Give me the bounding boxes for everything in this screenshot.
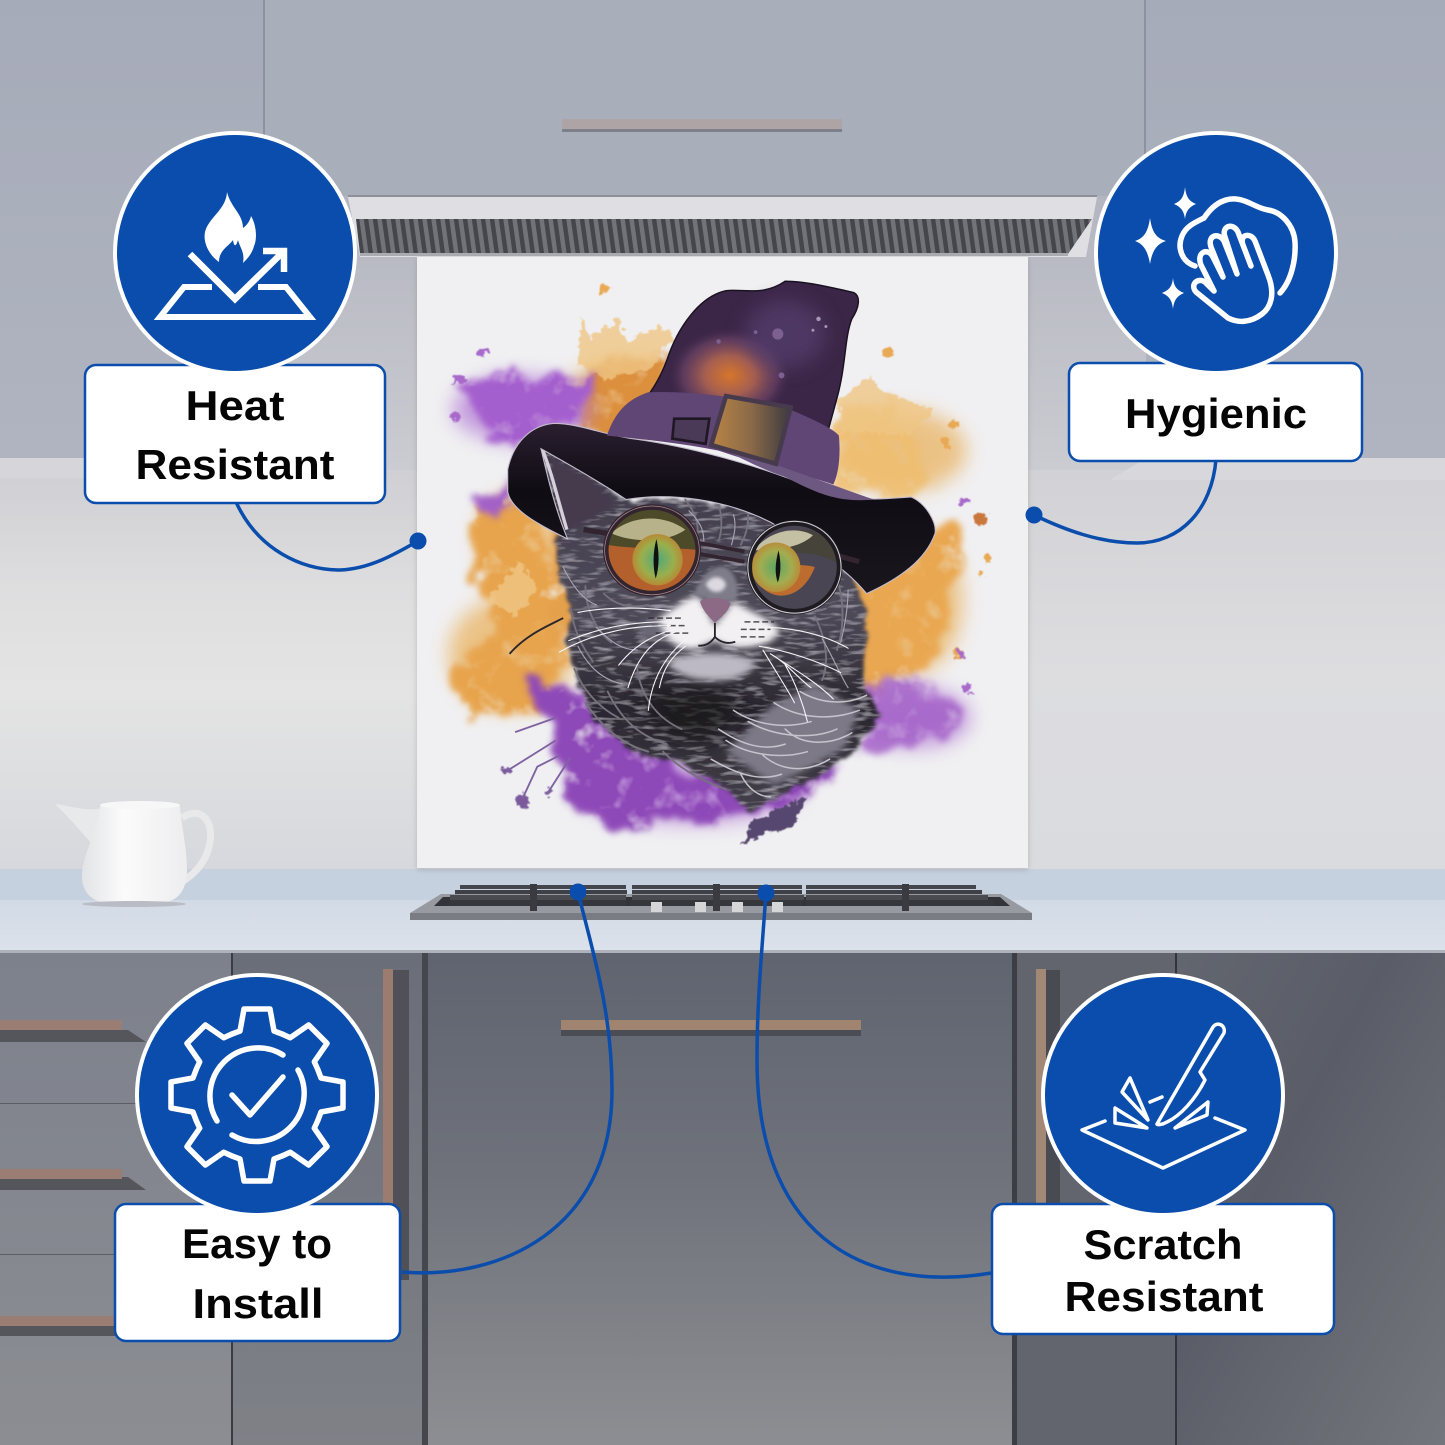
heading: Easy to: [182, 1220, 332, 1267]
label box: [115, 1204, 400, 1341]
upper cabinet handle: [562, 119, 842, 129]
soft orange wash: [448, 360, 966, 710]
heading line two: Resistant: [136, 441, 335, 488]
connector: scratch resistant: [757, 884, 991, 1277]
orange watercolor: [448, 353, 963, 718]
stray black line: [510, 618, 563, 654]
badge circle: [115, 133, 355, 373]
feature: easy to install: [115, 975, 400, 1341]
heading line two: Install: [192, 1280, 324, 1327]
witch hat: [508, 281, 935, 594]
label box: [1069, 363, 1362, 461]
hat band: [607, 392, 840, 484]
glasses frame: [584, 507, 859, 612]
wall tiles right: [1028, 470, 1445, 870]
muzzle: [659, 596, 780, 649]
feature: hygienic: [1069, 133, 1362, 461]
icon: hand wiping with sparkles: [1135, 187, 1295, 321]
feature: scratch resistant: [992, 975, 1334, 1334]
cheek shading: [637, 618, 682, 641]
nose bridge: [695, 567, 738, 603]
label box: [992, 1204, 1334, 1334]
right lens: [749, 523, 840, 612]
kettle: [55, 801, 211, 907]
right cabinet underside: [1110, 458, 1445, 480]
icon: flame over surface: [160, 192, 310, 317]
connector: hygienic: [1026, 459, 1216, 543]
hob: [410, 884, 1032, 920]
extractor hood: [348, 195, 1097, 257]
hat crown: [607, 281, 858, 436]
cat fur: [510, 449, 880, 812]
hat glow: [667, 326, 793, 424]
left cabinet underside: [0, 458, 264, 478]
heading line two: Resistant: [1064, 1273, 1264, 1320]
wall tiles left: [0, 470, 420, 870]
icon: knife scratching surface: [1082, 1024, 1245, 1168]
whiskers: [560, 608, 848, 722]
icon: gear with check: [171, 1009, 343, 1181]
heading: Hygienic: [1125, 390, 1307, 437]
soft purple wash: [452, 375, 970, 823]
lower cabinets: [0, 953, 1445, 1445]
beard: [667, 653, 756, 681]
chest highlight: [726, 684, 859, 786]
left lens: [606, 507, 698, 594]
paint drips: [508, 718, 571, 799]
cat artwork: [448, 281, 990, 846]
vertical handle left: [393, 970, 409, 1280]
heading: Scratch: [1084, 1221, 1242, 1268]
badge circle: [1096, 133, 1336, 373]
splashback panel: [417, 257, 1028, 868]
hat brim: [508, 423, 935, 594]
badge circle: [1043, 975, 1283, 1215]
upper left cabinet: [0, 0, 264, 458]
inner ear: [548, 454, 615, 533]
vertical handle right: [1046, 970, 1060, 1210]
orange splatter: [486, 285, 990, 659]
hat buckle: [672, 396, 791, 464]
heading: Heat: [186, 382, 285, 429]
glasses and eyes: [584, 506, 859, 613]
purple watercolor: [456, 375, 966, 834]
label box: [85, 365, 385, 503]
feature: heat resistant: [85, 133, 385, 503]
whisker spots: [648, 618, 774, 637]
badge circle: [137, 975, 377, 1215]
connector: heat resistant: [236, 502, 426, 570]
drawer handles: [0, 1030, 146, 1042]
upper middle cabinet: [265, 0, 1145, 196]
centre handle: [561, 1029, 861, 1036]
fur strands: [563, 500, 867, 797]
purple splatter: [450, 349, 972, 846]
worktop: [0, 869, 1445, 954]
nose and mouth: [700, 598, 730, 623]
recess under cabinets: [264, 195, 1146, 470]
connector: easy to install: [402, 884, 612, 1273]
upper right cabinet: [1146, 0, 1445, 458]
